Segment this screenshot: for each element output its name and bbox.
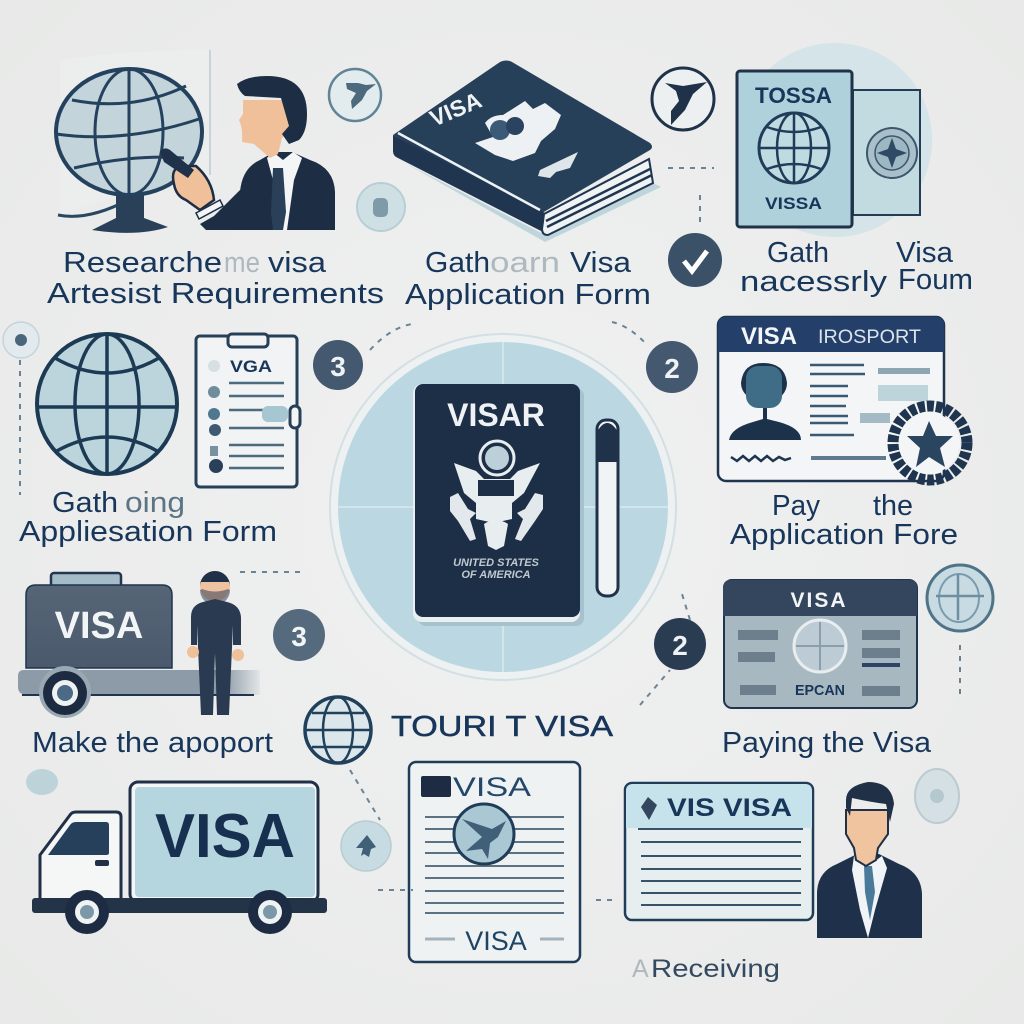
label: Appliesation Form [19,516,277,548]
label: Pay [772,490,820,522]
icon: small shield top [357,183,405,231]
label: the [873,490,913,522]
panel: center passport circle [330,334,676,680]
step: visa id card [718,317,967,551]
label: Artesist Requirements [47,278,384,310]
icon: seal [893,406,967,480]
label: oarn [490,247,560,279]
icon: central passport: UNITED STATES [453,557,540,569]
label: nacessrly [740,266,888,298]
icon: passport card pair: VISSA [765,194,822,213]
icon: visa sheet [409,762,580,962]
icon: man in suit [160,76,335,230]
icon: grey visa document: VISA [790,589,848,612]
label: Make the apoport [32,727,273,759]
badge: number 3 upper left: 3 [330,351,346,382]
icon: central passport [413,384,584,626]
icon: grey visa document: EPCAN [795,682,845,699]
label: Receiving [651,955,780,983]
icon: visa certificate [625,783,813,920]
icon: central passport: OF AMERICA [461,569,531,581]
step: truck [32,782,327,934]
step: gathering application form left [19,334,300,548]
step: paying the visa [722,580,932,759]
icon: person in black [187,571,244,715]
badge: number 2 upper right: 2 [664,353,680,384]
label: Paying the Visa [722,727,932,759]
icon: globe badge right [927,565,993,631]
icon: checklist clipboard: VGA [230,357,272,376]
label: Visa [896,237,954,269]
label: Foum [898,264,973,296]
badge: number 2 upper right [646,341,698,393]
icon: visa passport card: IROSPORT [818,327,921,348]
step: research visa requirements [47,50,384,310]
label: Gath [425,247,490,279]
label [405,247,651,311]
heading: tourist visa: TOURI T VISA [391,711,614,743]
icon: van with visa [18,573,260,718]
label: A [632,955,649,983]
icon: plane badge top right [652,68,714,130]
icon: visa sheet: VISA [465,926,527,956]
label: oing [125,487,185,519]
label: Visa [570,247,632,279]
step: make the airport [18,571,273,759]
icon: passport card pair [737,43,932,237]
icon: small plane badge top [329,69,381,121]
label: Gath [52,487,118,519]
badge: number 2 lower right [654,618,706,670]
icon: van with visa: VISA [55,605,143,647]
icon: visa truck: VISA [155,802,295,871]
icon: visa certificate: VIS VISA [667,794,792,822]
icon: decorative bubbles left [26,769,58,795]
label: Gath [767,237,829,269]
label [47,247,384,310]
step: visa document center [409,762,580,962]
icon: plane badge lower [341,821,391,871]
icon: closed dark passport book: VISA [426,87,485,132]
icon: central passport: VISAR [447,397,545,433]
step: receiving [625,782,922,983]
icon: grey visa document [723,580,917,708]
label [730,490,958,551]
icon: checklist clipboard [196,334,300,487]
badge: number 3 upper left [313,340,363,390]
label: visa [268,247,327,279]
icon: visa sheet: VISA [453,772,531,802]
heading: tourist visa [305,697,614,763]
icon: man in suit lower [817,782,922,938]
icon: visa passport card [718,317,967,481]
icon: globe badge [305,697,371,763]
icon: globe [37,334,177,474]
icon: check badge [668,233,722,287]
badge: number 2 lower right: 2 [672,630,688,661]
label: Application Fore [730,519,958,551]
icon: visa passport card: VISA [741,323,797,350]
badge: number 3 lower left [273,609,325,661]
icon: small side badge left [3,322,39,358]
icon: pen [597,420,618,596]
icon: pale badge lower right [915,769,959,823]
label [740,237,973,298]
icon: passport card pair: TOSSA [755,83,832,108]
icon: closed dark passport book [393,60,661,242]
icon: monitor globe [56,50,210,233]
step: gather necessary form [737,43,973,298]
label: Application Form [405,279,651,311]
label: me [224,247,260,279]
label: Researche [63,247,222,279]
icon: visa truck [32,782,327,934]
badge: number 3 lower left: 3 [291,621,307,652]
label [19,487,277,548]
step: gathering visa application form [393,60,661,311]
